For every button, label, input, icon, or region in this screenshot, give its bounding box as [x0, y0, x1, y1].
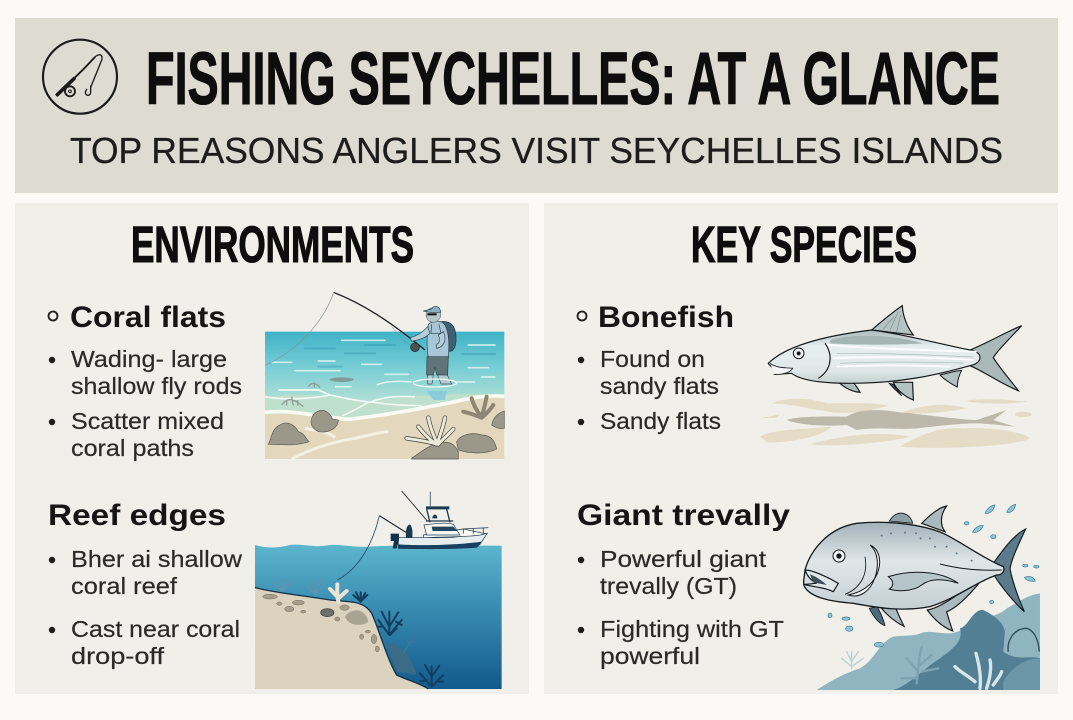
text block: bonefish: sandy flats — [600, 373, 719, 399]
panel: key species — [544, 203, 1058, 694]
text block: reef edges: Bher ai shallow — [71, 546, 242, 572]
text block: bonefish: Sandy flats — [600, 408, 721, 434]
text block: giant trevally: Giant trevally — [577, 499, 790, 532]
text block: reef edges: Cast near coral — [71, 616, 240, 642]
illustration: giant trevally over reef — [804, 504, 1040, 690]
illustration: wading angler on coral flats — [265, 292, 504, 459]
text block: coral flats: coral paths — [71, 435, 194, 461]
panel: environments — [15, 203, 529, 694]
angler — [440, 321, 456, 351]
text block: giant trevally — [577, 499, 790, 669]
illustration: bonefish over sand — [760, 306, 1032, 448]
header banner — [15, 18, 1058, 193]
text block: giant trevally: Powerful giant — [600, 546, 767, 572]
icon: fishing rod in circle — [43, 40, 117, 114]
text block: giant trevally: powerful — [600, 643, 700, 669]
text block: reef edges: Reef edges — [48, 499, 226, 532]
text block: coral flats: Coral flats — [70, 301, 226, 334]
text block: coral flats — [48, 301, 242, 461]
text block: bonefish: Found on — [600, 346, 705, 372]
text block: reef edges: coral reef — [71, 573, 178, 599]
heading: environments: ENVIRONMENTS — [131, 216, 414, 273]
text block: coral flats: Scatter mixed — [71, 408, 224, 434]
boat — [398, 533, 487, 549]
text block: reef edges: drop-off — [71, 643, 165, 669]
corals — [268, 410, 504, 459]
rod and line — [334, 292, 425, 350]
text block: giant trevally: trevally (GT) — [600, 573, 737, 599]
text block: bonefish — [578, 301, 734, 434]
text block: reef edges — [48, 499, 242, 669]
fishing line — [337, 516, 379, 580]
text block: coral flats: Wading- large — [71, 346, 227, 372]
subtitle: TOP REASONS ANGLERS VISIT SEYCHELLES ISLANDS — [70, 130, 1003, 171]
heading: key species: KEY SPECIES — [691, 216, 917, 273]
corals — [330, 584, 347, 602]
text block: giant trevally: Fighting with GT — [600, 616, 784, 642]
text block: bonefish: Bonefish — [598, 301, 734, 334]
text block: coral flats: shallow fly rods — [71, 373, 242, 399]
illustration: boat over reef drop-off — [255, 491, 502, 689]
